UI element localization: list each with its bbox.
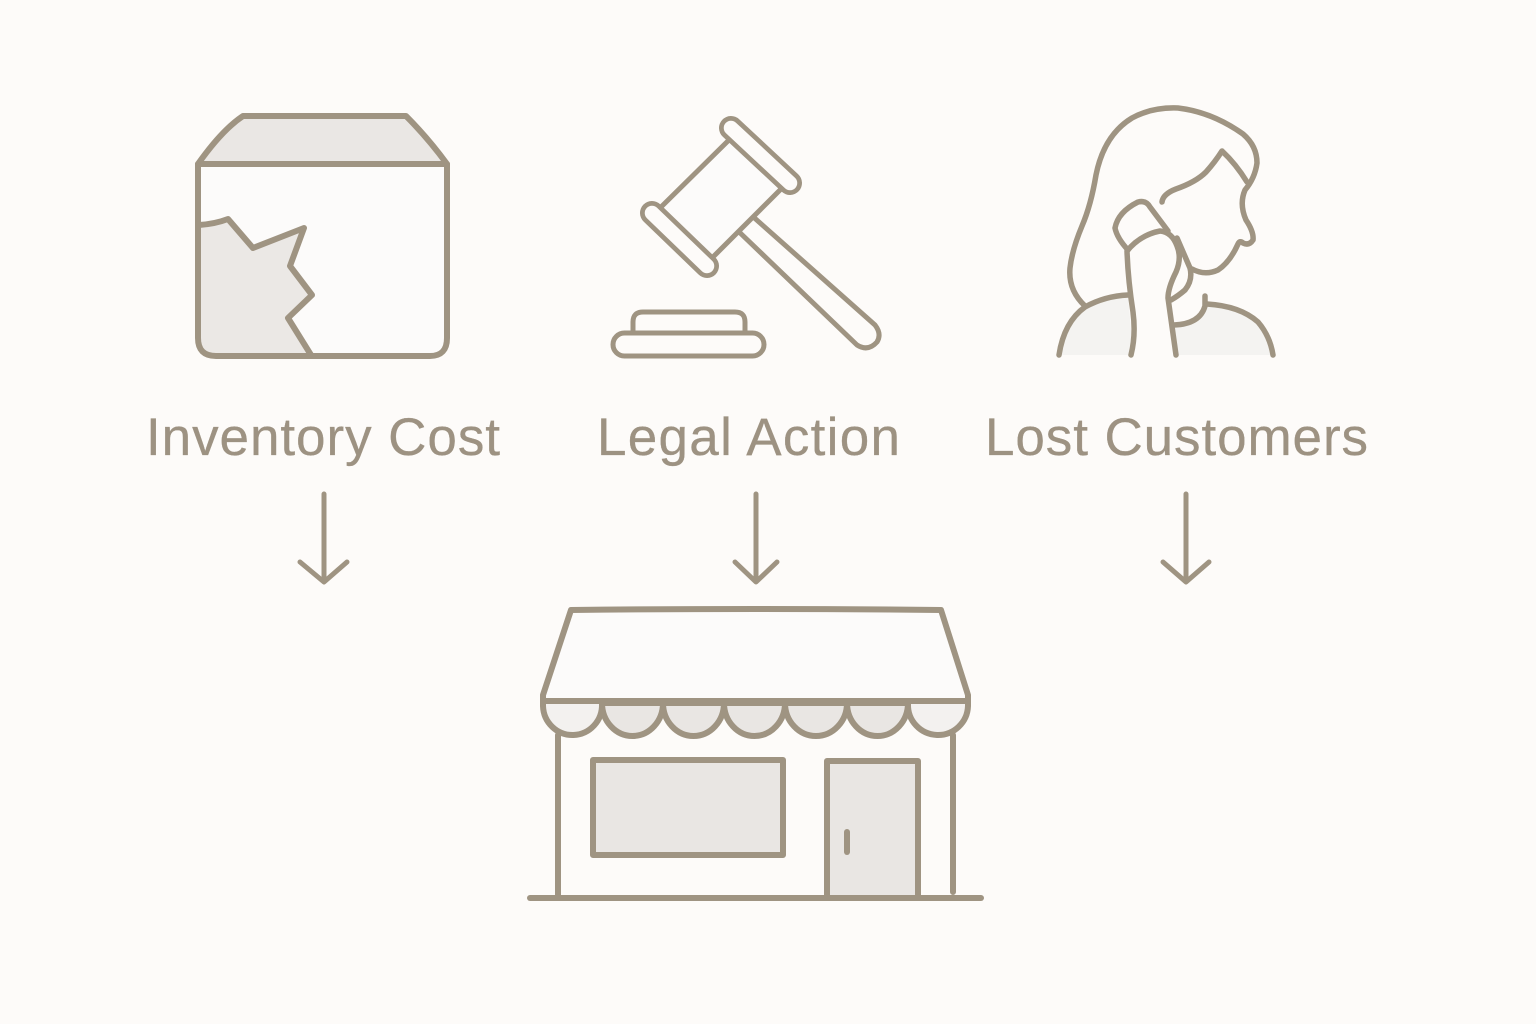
person fringe (1162, 151, 1247, 202)
box crack (199, 219, 312, 355)
person neck strand (1171, 238, 1191, 300)
icon: damaged box (198, 116, 447, 356)
person left shoulder (1059, 295, 1128, 355)
arrow: inventory cost to store (300, 494, 347, 582)
icon: person on phone (1059, 108, 1273, 355)
person phone (1115, 202, 1168, 250)
label: inventory cost: Inventory Cost (146, 408, 500, 467)
gavel top cap (731, 128, 790, 183)
gavel base (613, 312, 764, 356)
gavel head (658, 136, 785, 262)
store ground line (530, 895, 981, 901)
icon: storefront (530, 609, 981, 898)
label: legal action: Legal Action (597, 408, 900, 467)
store awning (543, 609, 968, 701)
box lid (198, 116, 447, 164)
awning scallops (543, 701, 968, 736)
gavel bottom cap (652, 213, 707, 266)
box outline (198, 164, 447, 356)
person shoulders fill (1059, 295, 1273, 355)
icon: gavel (613, 128, 879, 356)
store door (827, 761, 918, 897)
store window (593, 760, 783, 855)
box torn area (199, 219, 312, 355)
label: lost customers: Lost Customers (985, 408, 1368, 467)
store walls (558, 735, 953, 897)
door handle (844, 832, 850, 852)
gavel handle (735, 214, 879, 348)
person collar (1174, 296, 1205, 325)
person right shoulder (1207, 304, 1273, 355)
arrow: lost customers to store (1163, 494, 1209, 582)
person hair and face (1070, 108, 1257, 306)
person arm and hand (1127, 231, 1179, 355)
arrow: legal action to store (735, 494, 777, 582)
